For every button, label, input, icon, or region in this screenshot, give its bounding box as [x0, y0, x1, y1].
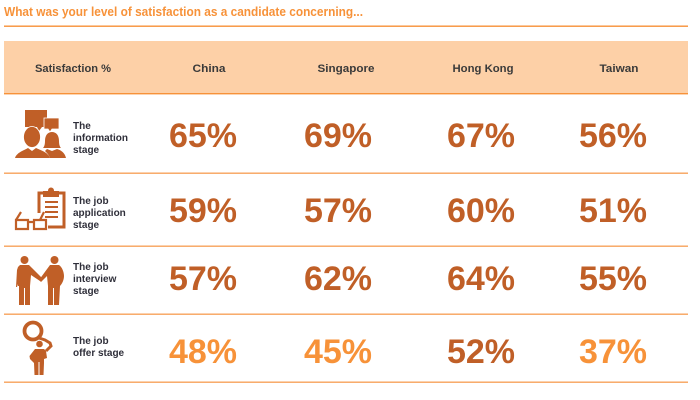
- row: job interview stage: 64%: [447, 260, 515, 298]
- table header: Hong Kong: [452, 63, 514, 75]
- label: stage: [73, 286, 100, 297]
- table header: [4, 41, 688, 94]
- row: job application stage: [16, 188, 647, 231]
- label: The job: [73, 262, 109, 273]
- row: job application stage: 51%: [579, 192, 647, 230]
- icon: handshake: [16, 256, 64, 305]
- table header: Taiwan: [600, 63, 639, 75]
- label: offer stage: [73, 348, 125, 359]
- row: information stage: 69%: [304, 117, 372, 155]
- row: job offer stage: 48%: [169, 333, 237, 371]
- row: information stage: 65%: [169, 117, 237, 155]
- table header: China: [192, 63, 226, 75]
- row: job offer stage: 37%: [579, 333, 647, 371]
- label: The job: [73, 196, 109, 207]
- row: job interview stage: [16, 256, 647, 305]
- table header: Singapore: [318, 63, 374, 75]
- label: interview: [73, 274, 117, 285]
- icon: two people talking: [15, 110, 66, 158]
- row: job interview stage: 55%: [579, 260, 647, 298]
- row: job interview stage: 57%: [169, 260, 237, 298]
- label: application: [73, 208, 126, 219]
- icon: man with magnifier: [24, 322, 51, 375]
- label: information: [73, 133, 128, 144]
- row: information stage: 67%: [447, 117, 515, 155]
- label: The: [73, 121, 91, 132]
- table header: Satisfaction %: [35, 63, 111, 75]
- row: job application stage: 57%: [304, 192, 372, 230]
- label: stage: [73, 145, 100, 156]
- label: stage: [73, 220, 100, 231]
- row: job application stage: 59%: [169, 192, 237, 230]
- row: job interview stage: 62%: [304, 260, 372, 298]
- icon: clipboard and glasses: [16, 188, 64, 229]
- row: information stage: 56%: [579, 117, 647, 155]
- row: information stage: [15, 110, 647, 158]
- title: What was your level of satisfaction as a candidate concerning...: [4, 5, 363, 19]
- row: job offer stage: [24, 322, 647, 375]
- row: job application stage: 60%: [447, 192, 515, 230]
- label: The job: [73, 336, 109, 347]
- row: job offer stage: 52%: [447, 333, 515, 371]
- row: job offer stage: 45%: [304, 333, 372, 371]
